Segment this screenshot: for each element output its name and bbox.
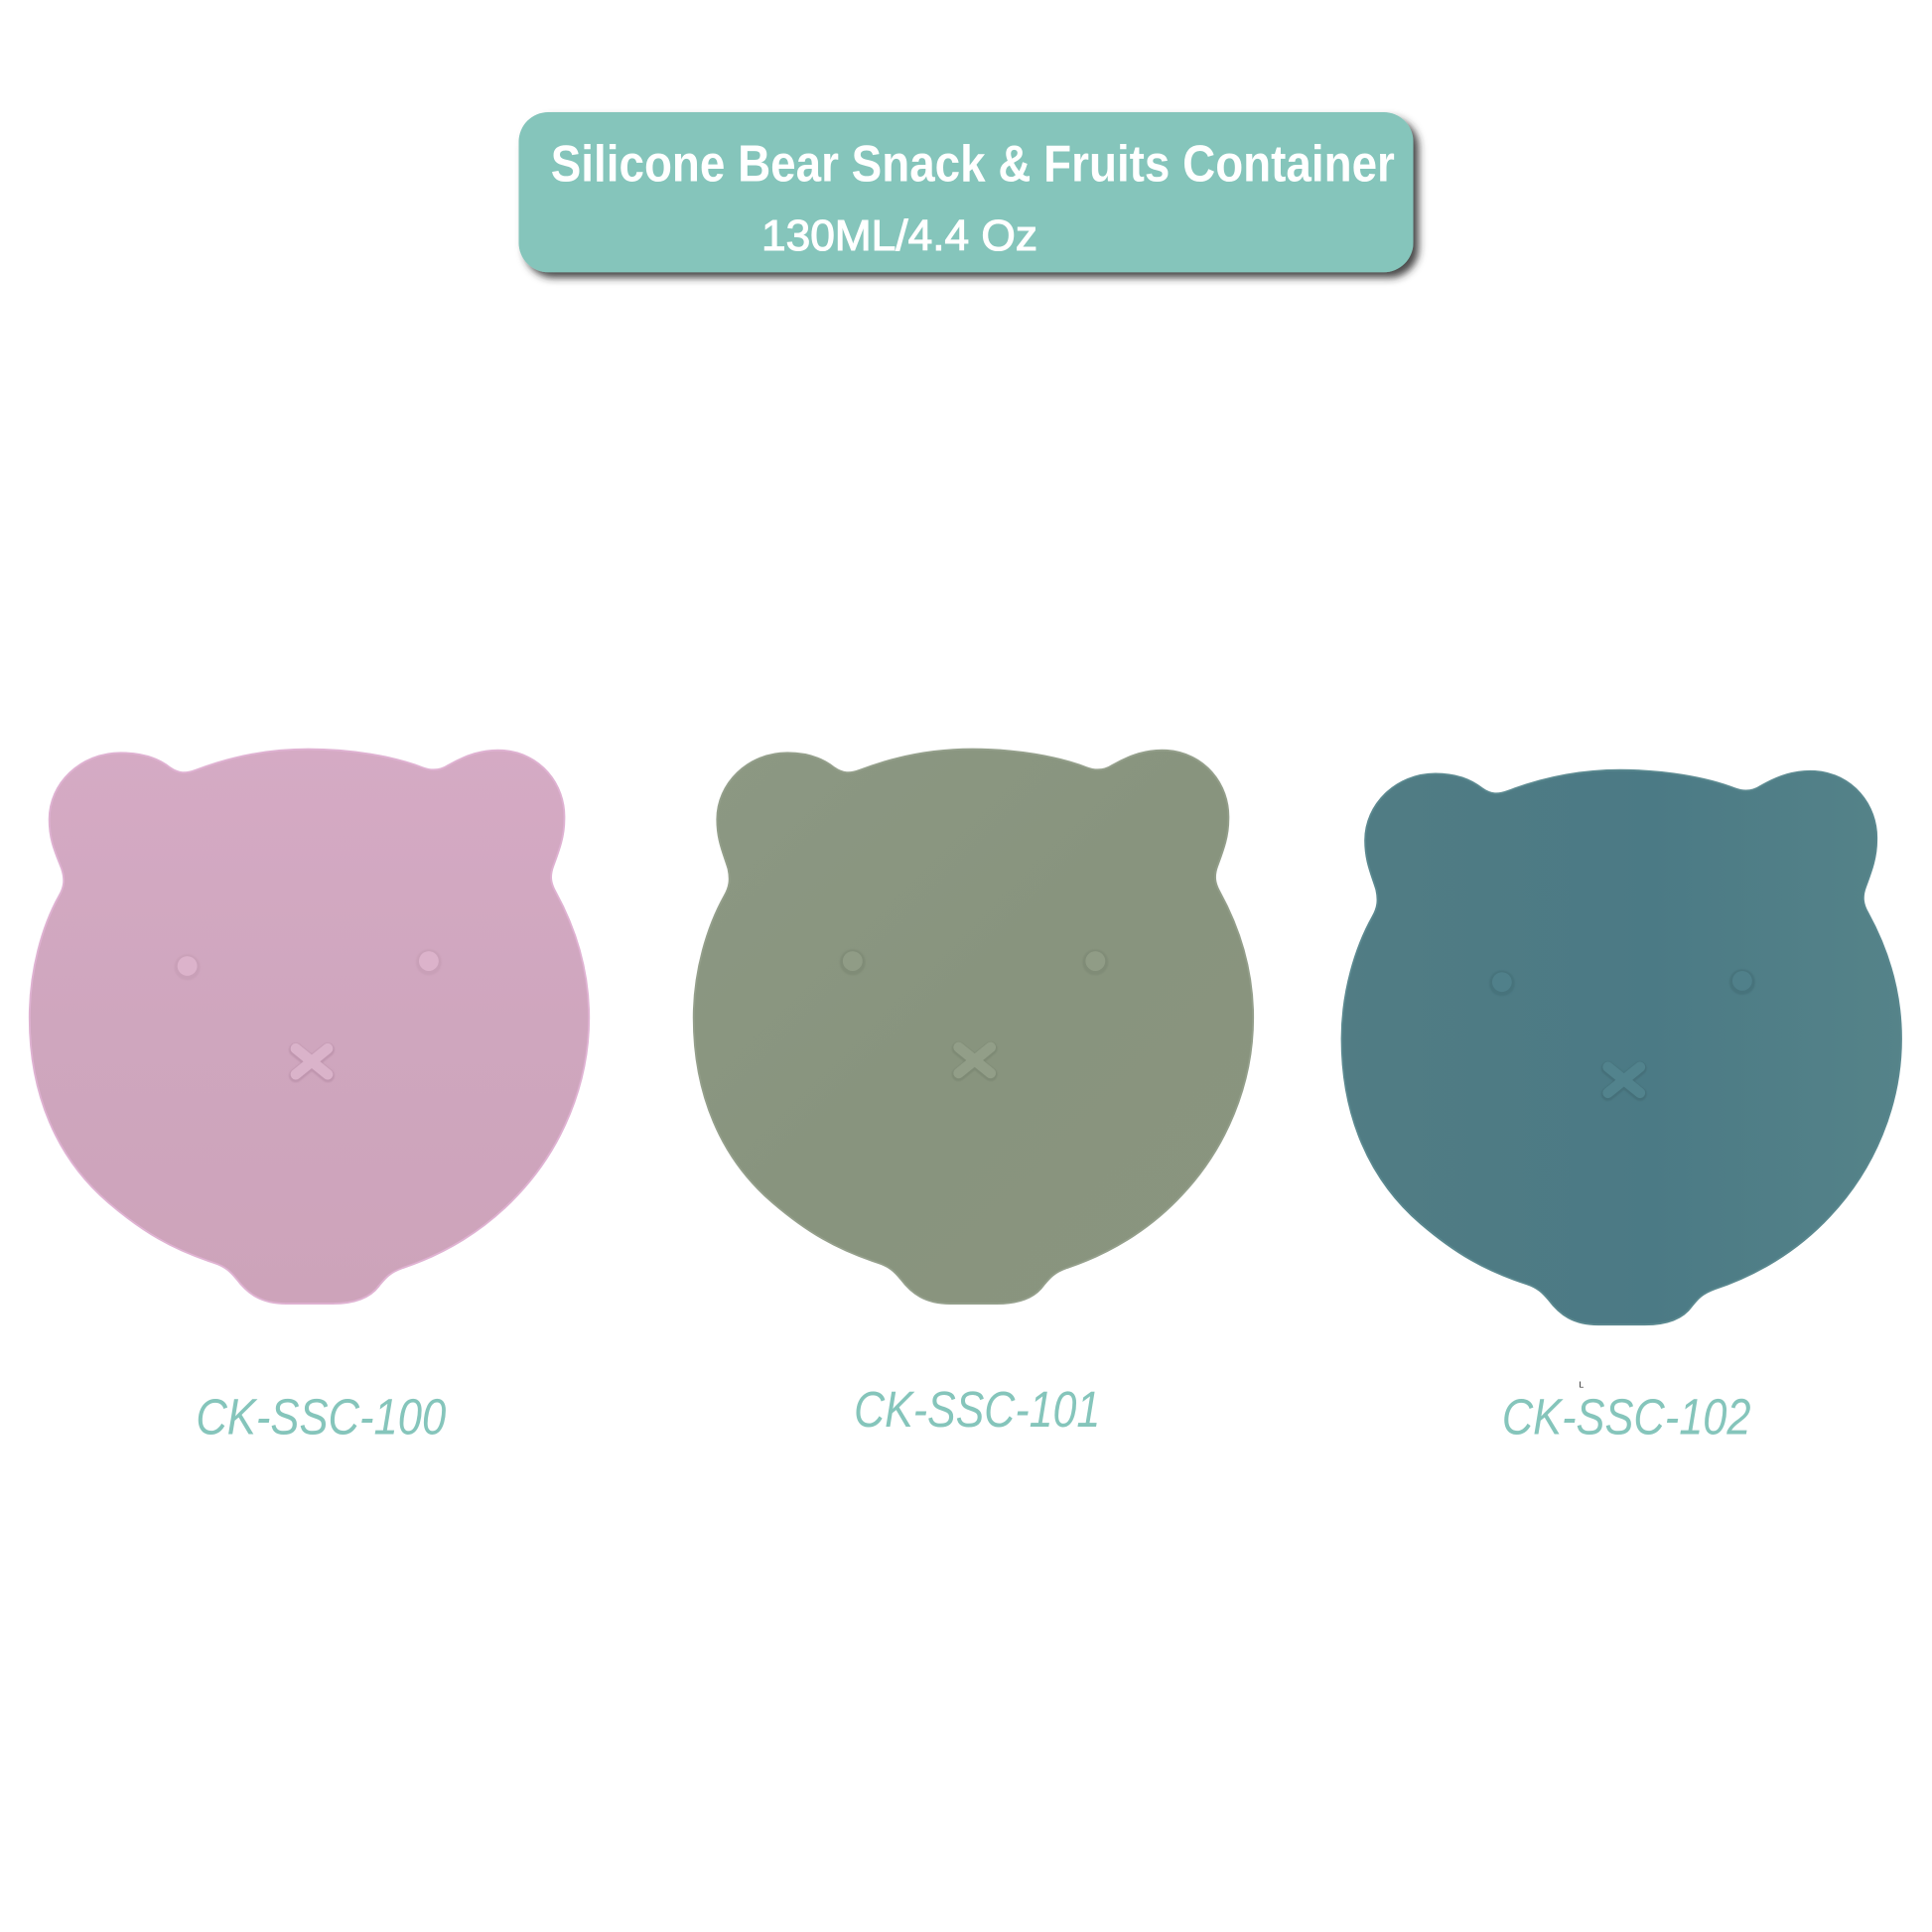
- teal bear right eye: [1729, 969, 1755, 995]
- pink bear nose: [296, 1048, 328, 1075]
- model label: CK-SSC-100: CK-SSC-100: [196, 1389, 446, 1446]
- green bear left eye: [840, 949, 866, 975]
- pink bear body: [30, 750, 589, 1304]
- banner pill: [518, 112, 1414, 272]
- teal bear body: [1342, 770, 1901, 1324]
- pink bear left eye: [175, 954, 201, 980]
- green bear right eye: [1082, 949, 1108, 975]
- capacity text: 130ML/4.4 Oz: [761, 212, 1037, 260]
- product: teal bear lid: [1342, 770, 1901, 1324]
- title text: Silicone Bear Snack & Fruits Container: [551, 135, 1395, 193]
- product: pink bear lid: [30, 750, 589, 1304]
- stray mark: L: [1579, 1379, 1584, 1389]
- title banner: [518, 112, 1414, 272]
- model label: CK-SSC-102: CK-SSC-102: [1502, 1389, 1751, 1446]
- teal bear left eye: [1489, 970, 1515, 996]
- green bear body: [694, 750, 1253, 1304]
- model label: CK-SSC-101: CK-SSC-101: [854, 1381, 1100, 1438]
- green bear nose: [959, 1047, 991, 1074]
- product: sage green bear lid: [694, 750, 1253, 1304]
- pink bear right eye: [416, 949, 442, 975]
- teal bear nose: [1608, 1067, 1640, 1094]
